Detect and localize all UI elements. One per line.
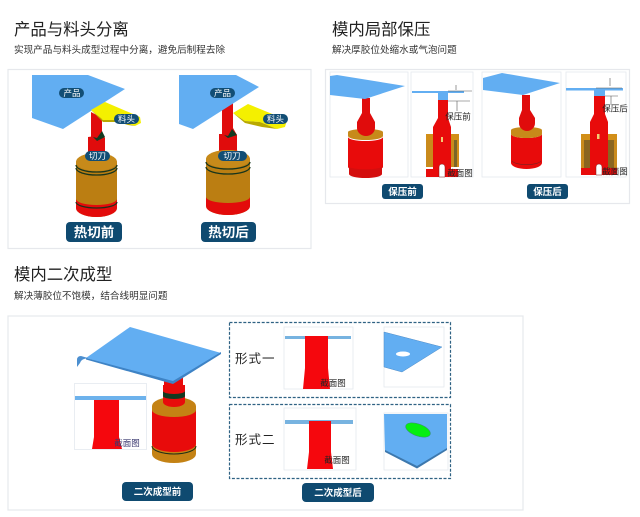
label: form one: 形式一	[235, 352, 276, 366]
section: form two	[284, 408, 356, 470]
label: runner after	[263, 114, 288, 124]
label: cutter	[85, 151, 110, 161]
diagram: after hot cut	[179, 75, 288, 242]
label: runner: 料头	[118, 114, 135, 124]
diagram: after pressure 3D	[482, 72, 561, 177]
label: product	[59, 88, 84, 98]
button: after hot cut	[201, 222, 256, 242]
diagram: before secondary forming	[74, 327, 221, 501]
section: form one	[284, 327, 353, 389]
panel: secondary forming	[8, 316, 523, 510]
label: cutter: 切刀	[89, 151, 106, 161]
label: before pressure: 保压前	[445, 112, 471, 122]
label: product: 产品	[63, 88, 81, 98]
heading: product and runner separation: 产品与料头分离	[14, 21, 129, 39]
heading: secondary forming: 模内二次成型	[14, 266, 112, 284]
section: form two: 截面图	[324, 455, 350, 465]
label: product after: 产品	[214, 88, 231, 98]
label: after pressure: 保压后	[602, 104, 628, 114]
section: form one: 截面图	[320, 378, 346, 388]
button: after hot cut: 热切后	[208, 224, 249, 240]
label: cutter after: 切刀	[223, 151, 241, 161]
subheading: separation description: 实现产品与料头成型过程中分离，避免后制程去除	[14, 44, 225, 56]
panel: pressure holding	[326, 70, 630, 204]
button: before hot cut	[66, 222, 122, 242]
label: section view after: 截面图	[602, 166, 628, 176]
diagram: before pressure 3D	[330, 72, 408, 178]
button: before pressure: 保压前	[388, 186, 417, 198]
panel: hot cutting	[8, 70, 311, 248]
button: after pressure: 保压后	[533, 186, 562, 198]
dashed box: form one	[230, 322, 450, 398]
subheading: secondary forming description: 解决薄胶位不饱模，结合线明显问题	[14, 290, 168, 302]
label: section view: 截面图	[447, 168, 473, 178]
plate with hole: form one	[384, 327, 444, 387]
subheading: pressure holding description: 解决厚胶位处缩水或气泡问题	[332, 44, 457, 56]
diagram: before hot cut	[32, 75, 141, 242]
diagram: before pressure section	[411, 72, 473, 178]
button: before secondary forming	[122, 482, 193, 501]
label: form two: 形式二	[235, 433, 276, 447]
button: after secondary forming: 二次成型后	[314, 487, 362, 499]
inset: section view	[74, 384, 146, 450]
button: after secondary forming	[302, 483, 374, 502]
label: runner after: 料头	[267, 114, 284, 124]
button: before secondary forming: 二次成型前	[134, 486, 182, 498]
button: after pressure	[527, 184, 568, 199]
diagram: after pressure section	[566, 72, 628, 177]
heading: local pressure holding: 模内局部保压	[332, 21, 430, 39]
button: before hot cut: 热切前	[74, 224, 114, 240]
plate with green dot: form two	[384, 413, 448, 470]
dashed box: form two	[230, 404, 450, 478]
label: product after	[210, 88, 235, 98]
label: section view: 截面图	[114, 438, 140, 448]
label: runner	[114, 114, 139, 124]
button: before pressure	[382, 184, 423, 199]
label: cutter after	[218, 151, 247, 161]
